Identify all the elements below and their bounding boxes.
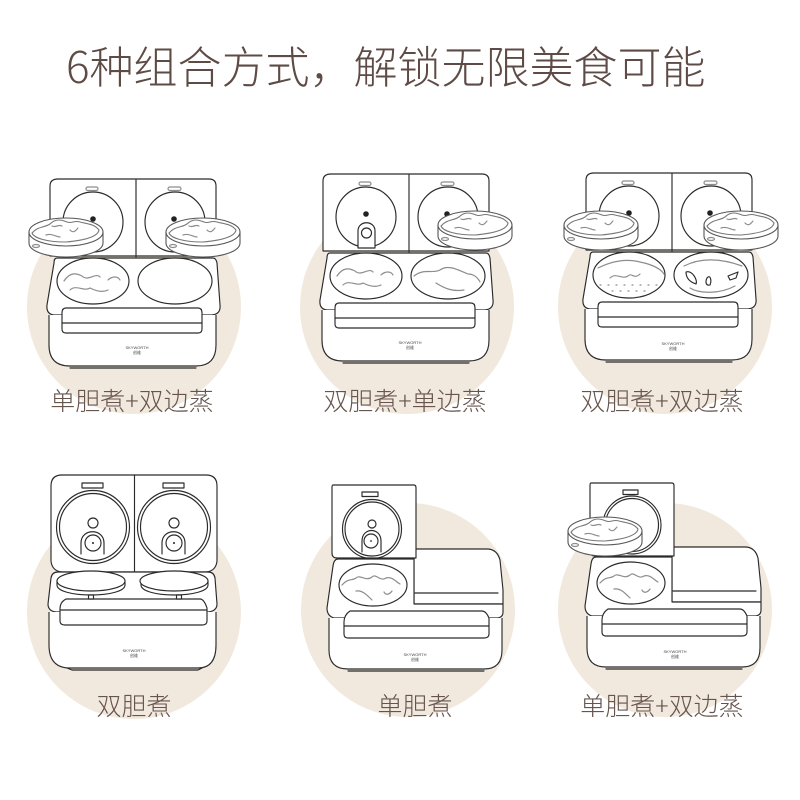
label: 双胆煮+单边蒸 — [323, 382, 487, 418]
appliance illustration: SKYWORTH — [398, 340, 422, 345]
label: 双胆煮 — [96, 687, 172, 723]
beige circle background — [301, 503, 515, 717]
appliance illustration — [568, 483, 761, 669]
appliance illustration: 创维 — [133, 349, 141, 355]
appliance illustration — [48, 475, 217, 670]
label: 单胆煮+双边蒸 — [580, 687, 744, 723]
appliance illustration: SKYWORTH — [403, 652, 427, 657]
label: 单胆煮+双边蒸 — [50, 382, 214, 418]
panel: single pot boil — [301, 485, 515, 723]
panel: double pot boil — [27, 475, 241, 723]
appliance illustration: 创维 — [130, 652, 138, 658]
appliance illustration: 创维 — [411, 656, 419, 662]
panel: double pot boil plus double side steam — [558, 173, 778, 418]
appliance illustration: SKYWORTH — [663, 649, 687, 654]
label: 双胆煮+双边蒸 — [580, 382, 744, 418]
appliance illustration: SKYWORTH — [125, 345, 149, 350]
panel: double pot boil plus single side steam — [300, 174, 514, 418]
appliance illustration: SKYWORTH — [122, 648, 146, 653]
beige circle background — [558, 503, 772, 717]
panel: single pot boil plus double side steam — [27, 179, 241, 418]
appliance illustration — [327, 485, 503, 671]
panel: single pot boil plus double side steam, second view — [558, 483, 772, 723]
label: 单胆煮 — [377, 687, 453, 723]
appliance illustration — [564, 173, 778, 362]
appliance illustration — [29, 179, 240, 368]
beige circle background — [558, 200, 772, 414]
appliance illustration — [320, 174, 512, 363]
beige circle background — [300, 200, 514, 414]
title: 6种组合方式，解锁无限美食可能 — [66, 32, 706, 96]
appliance illustration: 创维 — [671, 653, 679, 659]
appliance illustration: 创维 — [669, 345, 677, 351]
appliance illustration: 创维 — [406, 344, 414, 350]
appliance illustration: SKYWORTH — [661, 341, 685, 346]
beige circle background — [27, 505, 241, 719]
beige circle background — [27, 200, 241, 414]
